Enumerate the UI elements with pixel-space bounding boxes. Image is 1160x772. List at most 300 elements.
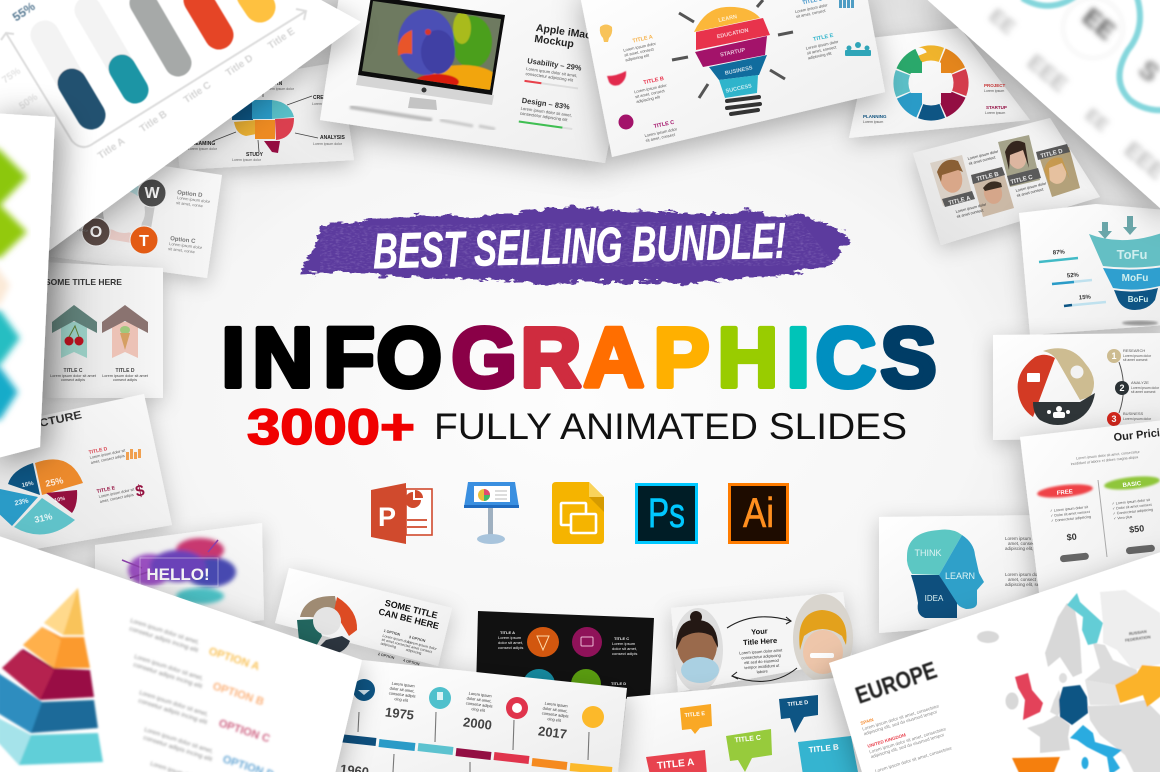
chart labels: Title C — [182, 80, 213, 106]
dark slide icons: TITLE D — [611, 681, 626, 686]
center text — [738, 625, 785, 675]
timeline bar — [339, 738, 612, 771]
Europe map: FEDERATION — [1125, 634, 1151, 643]
center text: elit sed do eiusmod — [744, 658, 779, 665]
brain labels: ANALYSIS — [320, 135, 345, 141]
timeline years: 2000 — [462, 714, 493, 733]
head diagram — [907, 530, 984, 618]
head text: Lorem ipsum dolor sit — [1005, 536, 1049, 541]
callout: title E — [680, 704, 712, 734]
girl with mask photo — [674, 608, 723, 691]
pie legend: Lorem ipsum dolor sit — [89, 448, 127, 460]
bulb option labels: Lorem ipsum dolor — [644, 126, 678, 138]
pie legend: Lorem ipsum dolor sit — [98, 487, 136, 499]
slide heading: SOME TITLE HERE — [45, 277, 122, 287]
pyramid text: consetur adipis incing elit — [128, 626, 199, 654]
Europe map: RUSSIAN — [1129, 629, 1147, 636]
ring slide options: 3 OPTION — [408, 635, 426, 643]
SWOT diagram: O — [90, 224, 102, 241]
panel: left blurred slide — [0, 113, 55, 460]
SWOT diagram: Option B — [55, 218, 81, 227]
head diagram: IDEA — [925, 594, 944, 603]
timeline years: 2017 — [537, 723, 568, 742]
panel: dark icons slide — [476, 611, 654, 700]
panel: mask portraits slide — [670, 590, 860, 695]
dark slide icons: TITLE C — [614, 636, 629, 641]
timeline text: cing elit — [547, 716, 562, 723]
main title: G — [452, 310, 517, 404]
bulb option labels — [621, 0, 851, 144]
portrait B: TITLE B — [976, 171, 1000, 183]
mockup text: Lorem ipsum dolor sit amet, — [526, 66, 578, 78]
callout: title A — [646, 750, 707, 772]
funnel bars — [1039, 249, 1106, 306]
chart labels — [0, 0, 297, 162]
ring slide options — [377, 629, 439, 670]
timeline text: Lorem ipsum — [544, 701, 569, 708]
dark slide icons: Lorem ipsum — [498, 635, 522, 640]
icon: PowerPoint — [371, 483, 432, 544]
step text: Lorem ipsum dolor — [1123, 417, 1152, 421]
pyramid options: OPTION A — [207, 645, 261, 673]
dark slide icons: dolor sit amet, — [498, 640, 523, 645]
head text: amet, consect — [1008, 541, 1037, 546]
ring slide options: 1 OPTION — [383, 629, 401, 637]
pie legend: $ — [134, 482, 146, 501]
basic plan: ✓ Consectetur adipiscing — [1113, 508, 1153, 516]
chart labels: Title A — [96, 136, 127, 162]
callout: title B: TITLE B — [808, 742, 839, 755]
blurred chevrons — [0, 145, 27, 420]
bulb option labels: Lorem ipsum dolor — [805, 39, 839, 51]
parrot photo — [362, 1, 501, 90]
timeline text: consetur adipis — [466, 700, 493, 709]
pyramid — [0, 588, 103, 765]
funnel chart: ToFu — [1117, 247, 1147, 262]
dark slide icons: consect adipis — [612, 651, 637, 656]
main title: O — [376, 310, 442, 404]
panel: pyramid slide — [0, 533, 362, 772]
timeline text: dolor sit amet, — [542, 705, 568, 714]
callout: title B — [798, 736, 858, 772]
basic plan — [1098, 474, 1160, 557]
blurred slide labels: EEE — [1023, 49, 1073, 97]
chart axis — [1, 9, 306, 147]
pie legend: TITLE E — [96, 485, 116, 495]
step text: sit amet consect — [1131, 390, 1156, 394]
panel: top right blurred slide — [922, 0, 1160, 217]
pyramid text: Lorem ipsum dolor sit amet, — [143, 727, 214, 755]
team text: Lorem ipsum dolor — [955, 202, 987, 214]
callout: title D — [779, 695, 818, 733]
three part cycle — [1018, 348, 1095, 425]
bulb option labels: Lorem ipsum dolor — [623, 41, 657, 53]
panel: light bulb slide — [579, 0, 885, 157]
step text: Lorem ipsum dolor — [1123, 354, 1152, 358]
callout: title A: TITLE A — [657, 757, 695, 772]
brain labels: Lorem ipsum dolor — [232, 158, 262, 162]
basic plan: $50 — [1129, 523, 1145, 535]
panel: head puzzle slide — [879, 515, 1049, 633]
bar chart — [45, 0, 260, 115]
step text — [1123, 348, 1160, 421]
ring slide options: sit amet consect — [406, 644, 432, 654]
numbered steps: 1 — [1111, 351, 1117, 361]
ring slide options: Lorem ipsum dolor — [407, 640, 438, 651]
banner text: BEST SELLING BUNDLE! — [372, 213, 787, 279]
chart labels: 50% — [17, 92, 40, 112]
main title: F — [324, 310, 375, 404]
center text: Title Here — [743, 636, 777, 647]
callout: title D: TITLE D — [787, 700, 809, 708]
blurred slide labels: EE — [1081, 105, 1113, 135]
center text: labore — [756, 668, 769, 674]
SWOT diagram: Option C — [170, 236, 196, 245]
mockup text: Lorem ipsum dolor sit amet, — [520, 106, 572, 118]
bulb option labels: sit amet, consect — [624, 46, 655, 58]
ring slide title — [377, 597, 443, 631]
icon: Photoshop — [636, 484, 696, 542]
bulb option labels: TITLE B — [643, 76, 665, 86]
portrait D: TITLE D — [1040, 148, 1064, 160]
ring slide options: adipiscing — [405, 648, 422, 656]
ring captions: Lorem ipsum — [984, 89, 1004, 93]
panel: circular icons slide — [849, 28, 1030, 138]
main title: N — [252, 310, 313, 404]
fully animated slides: FULLY ANIMATED SLIDES — [434, 405, 907, 447]
timeline text: consetur adipis — [542, 710, 569, 719]
arrow with ice cream — [102, 305, 148, 358]
pricing subtitle: Lorem ipsum dolor sit amet, consectetur — [1076, 450, 1141, 461]
timeline text: cing elit — [471, 706, 486, 713]
bulb option labels: adipiscing elit — [636, 94, 661, 104]
center text: Your — [751, 626, 768, 637]
free plan: ✓ Dolor sit amet consect — [1050, 510, 1090, 518]
icon: Google Slides — [552, 482, 604, 544]
brush stroke banner — [300, 207, 853, 284]
brain labels: Lorem ipsum dolor — [313, 142, 343, 146]
bulb option labels: TITLE E — [813, 33, 834, 43]
basic plan: ✓ Lorem ipsum dolor sit — [1112, 498, 1150, 506]
pyramid text: consetur adipis incing elit — [142, 735, 213, 763]
step text: ANALYZE — [1131, 380, 1149, 385]
panel: arrows slide — [40, 262, 163, 398]
light bulb layers: BUSINESS — [724, 65, 753, 77]
ring captions: STARTUP — [986, 105, 1007, 110]
Europe heading: EUROPE — [852, 657, 940, 710]
pyramid text: consetur adipis incing elit — [132, 662, 203, 690]
ring slide title: SOME TITLE — [384, 598, 439, 621]
light bulb layers: STARTUP — [720, 47, 746, 59]
SWOT diagram: Lorem ipsum dolor — [177, 195, 211, 204]
bulb option labels: TITLE A — [632, 34, 653, 45]
pie legend: amet, consect adipis — [99, 493, 134, 504]
panel: brain puzzle slide — [170, 62, 354, 170]
panel: some title ring slide — [275, 568, 452, 670]
arrow captions — [50, 368, 149, 382]
monitor — [350, 0, 510, 129]
arrow captions: TITLE C — [64, 368, 83, 374]
icon: PowerPoint: P — [378, 502, 396, 532]
Europe text: Lorem ipsum dolor sit amet, consectetur — [869, 726, 947, 754]
panel: structure pie slide — [0, 394, 172, 557]
bulb option labels: sit amet, consect — [635, 88, 666, 99]
panel: timeline slide — [333, 660, 627, 772]
mockup text: Usability – 29% — [527, 56, 582, 73]
SWOT diagram: Option D — [177, 190, 203, 199]
head text: amet, consect — [1008, 577, 1037, 582]
funnel bars: 87% — [1053, 249, 1066, 257]
panel: callouts slide — [618, 677, 862, 772]
SWOT diagram: Lorem ipsum dolor — [55, 224, 89, 233]
panel: Europe map slide — [829, 549, 1160, 772]
timeline text: cing elit — [394, 696, 409, 703]
arrow captions: Lorem ipsum dolor sit amet — [50, 374, 97, 378]
panel: funnel slide — [1019, 204, 1160, 335]
ring captions: PROJECT — [984, 83, 1006, 88]
icon: Illustrator: Ai — [743, 489, 774, 536]
head text: adipiscing elit, sed — [1005, 546, 1042, 551]
pricing subtitle — [1070, 450, 1141, 466]
ring captions — [863, 83, 1007, 124]
Europe map — [977, 590, 1160, 772]
ring captions: Lorem ipsum — [863, 120, 883, 124]
pyramid text: Lorem ipsum dolor sit amet, — [129, 618, 200, 646]
bulb option labels: sit amet, consect — [645, 132, 676, 143]
mockup text: Design – 83% — [521, 96, 571, 111]
timeline stems — [358, 712, 589, 772]
icon: Photoshop: Ps — [648, 489, 685, 536]
bulb option icons — [600, 0, 871, 130]
brain labels: Lorem ipsum dolor — [265, 87, 295, 91]
timeline text: Lorem ipsum — [391, 681, 416, 688]
panel: pricing slide — [1020, 420, 1160, 600]
SWOT diagram: sit amet, conse — [176, 200, 204, 208]
timeline text: dolor sit amet, — [389, 685, 415, 694]
bulb option labels: TITLE C — [653, 120, 675, 130]
slide heading: STRUCTURE — [5, 409, 83, 437]
blurred slide labels: EE — [1077, 3, 1120, 46]
slide count: 3000+ — [247, 399, 415, 455]
brain labels: STUDY — [246, 152, 264, 158]
panel: hello splash slide — [95, 523, 264, 640]
blurred teal rings — [1022, 0, 1160, 110]
mockup text: Apple iMac — [535, 22, 592, 42]
ring slide options: adipiscing — [380, 641, 397, 649]
panel: red cycle slide — [993, 333, 1160, 440]
portrait B — [971, 167, 1014, 217]
callout: title E: TITLE E — [684, 711, 706, 719]
pyramid text: consetur adipis incing elit — [137, 698, 208, 726]
step text: sit amet consect — [1123, 358, 1148, 362]
timeline years: 1975 — [384, 704, 415, 723]
main title: C — [816, 310, 876, 404]
arrow captions: consect adipis — [113, 378, 137, 382]
funnel chart — [1089, 216, 1160, 326]
main title: R — [520, 310, 581, 404]
chart labels: 75% — [0, 66, 23, 86]
Europe text — [860, 697, 953, 772]
numbered steps — [1107, 349, 1129, 426]
pricing subtitle: incididunt ut labore et dolore magna aliqua — [1071, 455, 1138, 466]
ring chart — [297, 596, 357, 655]
paint splash: HELLO! — [146, 565, 210, 584]
center text: consectetur adipiscing — [741, 653, 781, 660]
free plan: ✓ Consectetur adipiscing — [1051, 515, 1091, 523]
mockup text: consectetur adipiscing elit — [520, 111, 569, 122]
callout: title C: TITLE C — [734, 735, 761, 744]
SWOT diagram: Lorem ipsum dolor — [169, 241, 203, 250]
SWOT diagram: S — [99, 179, 110, 196]
head text: Lorem ipsum dolor sit — [1005, 572, 1049, 577]
chart labels: Title E — [266, 26, 297, 52]
team text: sit amet consect — [956, 208, 985, 219]
chart labels: Title B — [138, 109, 169, 135]
free plan: FREE — [1057, 489, 1073, 497]
brain puzzle diagram — [232, 100, 294, 153]
ring slide options: 2 OPTION — [377, 652, 395, 660]
pyramid options: OPTION C — [217, 717, 271, 745]
portrait A — [930, 155, 975, 207]
ring slide options: sit amet consect — [381, 638, 407, 648]
light bulb layers: SUCCESS — [725, 83, 753, 95]
Europe text: Lorem ipsum dolor sit amet, consectetur — [862, 703, 940, 732]
light bulb layers: LEARN — [718, 14, 738, 24]
pie chart: 25% — [45, 475, 64, 489]
basic plan: ✓ Dolor sit amet consect — [1112, 503, 1152, 511]
timeline text: dolor sit amet, — [466, 695, 492, 704]
panel: SWOT slide — [40, 150, 222, 278]
head text: adipiscing elit, sed — [1005, 582, 1042, 587]
team text: sit amet consect — [968, 155, 997, 166]
brain labels: Lorem ipsum dolor — [188, 147, 218, 151]
mockup text: consectetur adipiscing elit — [525, 71, 574, 83]
mockup text: Mockup — [534, 33, 575, 50]
main title: I — [786, 310, 810, 404]
bulb option labels: Lorem ipsum dolor — [795, 2, 829, 14]
Europe text: UNITED KINGDOM — [867, 732, 907, 749]
pie chart: 31% — [34, 511, 53, 525]
bulb option labels: sit amet, consect — [796, 8, 827, 19]
center text: tempor incididunt ut — [744, 663, 780, 670]
basic plan: ✓ Vero plus — [1113, 515, 1133, 521]
panel: bar chart slide — [0, 0, 361, 290]
step text: RESEARCH — [1123, 348, 1145, 353]
team text: sit amet consect — [1016, 187, 1045, 198]
pie legend — [88, 446, 146, 504]
pyramid text: Lorem ipsum dolor sit amet, — [133, 654, 204, 682]
timeline years — [339, 704, 568, 772]
SWOT diagram: T — [139, 233, 149, 250]
pie chart: 10% — [54, 496, 66, 504]
brain labels: LEARN — [265, 81, 283, 87]
free plan: ✓ Lorem ipsum dolor sit — [1050, 505, 1088, 513]
SWOT diagram — [77, 180, 210, 254]
center text: Lorem ipsum dolor amet — [739, 647, 783, 655]
arrow captions: Lorem ipsum dolor sit amet — [102, 374, 149, 378]
timeline text: consetur adipis — [389, 690, 416, 699]
paint splash — [122, 538, 236, 604]
timeline text — [389, 681, 569, 723]
team text — [955, 149, 1047, 219]
main title: H — [718, 310, 778, 404]
numbered steps: 3 — [1111, 414, 1117, 424]
brain labels — [188, 81, 345, 162]
pie legend: TITLE D — [88, 446, 108, 456]
arrow captions: consect adipis — [61, 378, 85, 382]
timeline icons — [353, 679, 604, 728]
dark slide icons: consect adipis — [498, 645, 523, 650]
bulb option labels: adipiscing elit — [625, 52, 650, 62]
pyramid text — [128, 618, 220, 772]
panel: team faces slide — [913, 118, 1100, 245]
ring slide title: CAN BE HERE — [377, 606, 440, 631]
SWOT diagram: W — [144, 185, 160, 202]
pyramid options — [207, 645, 275, 772]
arrow with cherries — [52, 305, 97, 358]
head diagram: THINK — [914, 548, 942, 558]
cycle arrows — [727, 617, 797, 681]
free plan — [1037, 482, 1093, 562]
callout: title C — [726, 729, 772, 772]
light bulb layers: EDUCATION — [716, 28, 749, 40]
pie chart: 16% — [21, 481, 35, 489]
portrait A: TITLE A — [948, 196, 972, 207]
light bulb layers — [672, 0, 793, 114]
head text — [1005, 536, 1049, 587]
timeline text: Lorem ipsum — [468, 691, 493, 698]
girl with hat photo — [793, 594, 853, 680]
ring captions: Lorem ipsum — [985, 111, 1005, 115]
funnel bars: 15% — [1079, 294, 1092, 302]
step text: BUSINESS — [1123, 411, 1144, 416]
Europe text: adipiscing elit, sed do eiusmod tempor — [863, 709, 938, 736]
free plan: $0 — [1066, 532, 1077, 543]
panel: iMac mockup slide — [320, 0, 640, 163]
pyramid options: OPTION B — [211, 680, 265, 708]
chart labels: Title D — [224, 53, 255, 79]
ring captions: PLANNING — [863, 114, 887, 119]
blurred slide labels: EE — [985, 5, 1019, 39]
funnel chart: MoFu — [1122, 273, 1148, 284]
Europe text: SPAIN — [860, 717, 874, 726]
Europe text: adipiscing elit, sed do eiusmod tempor — [870, 732, 945, 759]
team text: Lorem ipsum dolor — [967, 149, 999, 161]
brain labels: Lorem ipsum — [312, 102, 332, 106]
funnel bars: 52% — [1067, 272, 1080, 280]
main title: A — [584, 310, 644, 404]
bulb option labels: adipiscing elit — [807, 50, 833, 60]
portrait C — [998, 135, 1041, 187]
ring slide options: 4 OPTION — [403, 658, 420, 666]
head diagram: LEARN — [945, 571, 975, 581]
pie legend: amet, consect adipis — [90, 454, 125, 465]
software icons — [371, 482, 788, 544]
dark slide icons: TITLE A — [500, 630, 515, 635]
mockup text — [519, 22, 592, 131]
bulb option labels: sit amet, consect — [806, 44, 838, 56]
main title: P — [654, 310, 710, 404]
step text: Lorem ipsum dolor — [1131, 386, 1160, 390]
portrait D — [1036, 144, 1080, 197]
bulb option labels: Lorem ipsum dolor — [634, 82, 668, 94]
team text: Lorem ipsum dolor — [1015, 181, 1047, 193]
dark slide icons: Lorem ipsum — [612, 641, 636, 646]
inner cross corners of ring — [910, 61, 953, 105]
main title: I — [222, 310, 245, 404]
pyramid text: Lorem ipsum dolor sit amet, — [138, 690, 209, 718]
numbered steps: 2 — [1119, 383, 1125, 393]
